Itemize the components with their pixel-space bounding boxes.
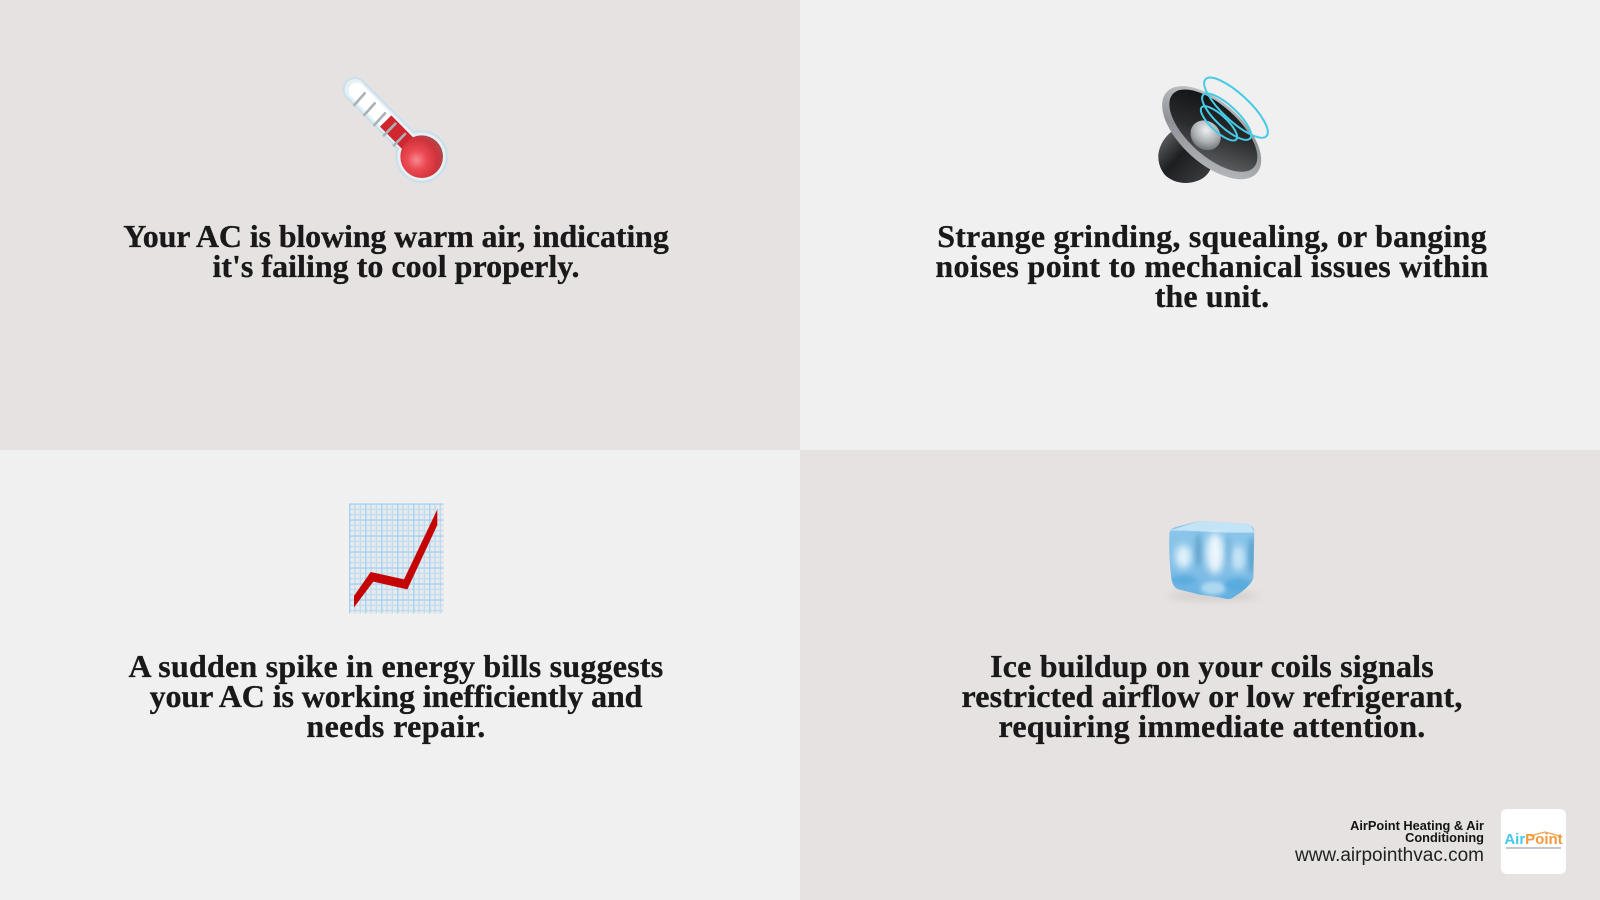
text: warm air: it's failing to cool properly. [212,248,580,284]
text: ice buildup: Ice buildup on your coils signals [990,648,1434,684]
text: energy bills: A sudden spike in energy bills suggests [129,648,663,684]
text: strange noises: the unit. [1155,278,1269,314]
text: ice buildup: requiring immediate attention. [998,708,1426,744]
text: energy bills: needs repair. [306,708,486,744]
text: strange noises: Strange grinding, squealing, or banging [937,218,1487,254]
logo tagline [1506,847,1561,849]
text: strange noises: noises point to mechanical issues within [935,248,1489,284]
text: ice buildup: restricted airflow or low refrigerant, [962,678,1462,714]
magnet [1158,129,1212,183]
icon: thermometer [342,77,448,183]
brand name [1350,818,1484,845]
logo roof [1530,831,1560,837]
brand block [1295,809,1566,874]
panel: strange noises [800,0,1600,450]
logo [1501,809,1566,874]
text: energy bills [128,648,663,744]
text: warm air: Your AC is blowing warm air, indicating [123,218,669,254]
text: strange noises [935,218,1489,314]
text: energy bills: your AC is working inefficiently and [150,678,642,714]
icon: rising chart [349,503,444,614]
panel: ice buildup [800,450,1600,900]
website url: www.airpointhvac.com [1295,845,1484,866]
text: warm air [123,218,669,284]
cone [1156,75,1271,186]
rim [1146,69,1277,196]
brand name: Conditioning [1405,830,1484,845]
text: ice buildup [962,648,1462,744]
brand name: AirPoint Heating & Air [1350,818,1484,833]
icon: speaker [1158,76,1269,183]
logo wordmark: AirPoint [1504,831,1563,848]
panel: warm air [0,0,800,450]
icon: ice cube [1169,521,1254,602]
panel: energy bills [0,450,800,900]
